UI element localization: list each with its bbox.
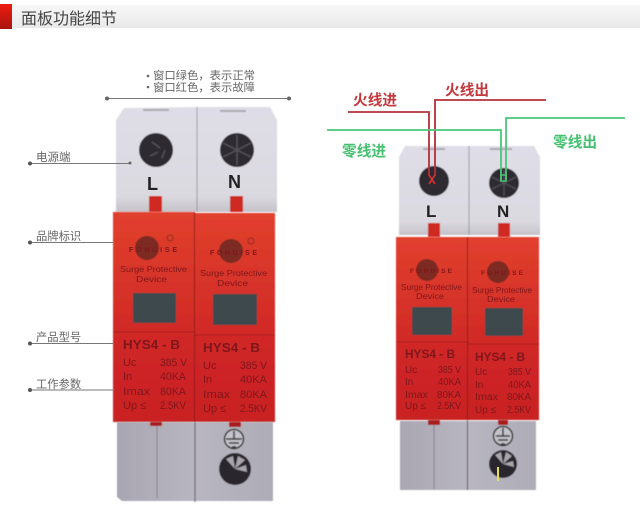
left device printed labels: 80KA: [160, 386, 187, 398]
right device red body: [396, 237, 539, 420]
right device printed labels: 2.5KV: [507, 405, 531, 416]
left device printed labels: FOHUISE: [210, 250, 257, 257]
left device brand logos: [135, 236, 159, 260]
right device printed labels: 40KA: [438, 377, 461, 388]
left device printed labels: 40KA: [160, 371, 187, 383]
wire: neutral in: [327, 130, 501, 180]
callout: 品牌标识: 品牌标识: [36, 229, 81, 243]
right device top grey housing: [399, 146, 540, 237]
right device N terminal screw: [489, 168, 519, 198]
left device printed labels: Up ≤: [123, 400, 146, 412]
left device printed labels: FOHUISE: [129, 247, 177, 254]
callout: 电源端: 电源端: [36, 150, 70, 164]
left device printed labels: In: [123, 371, 132, 383]
left device status windows: [133, 293, 176, 323]
callout: 工作参数: [28, 377, 113, 392]
left device printed labels: Uc: [203, 360, 217, 372]
header bar: [0, 4, 640, 29]
left device printed labels: Device: [217, 278, 248, 288]
right device printed labels: 80KA: [437, 390, 461, 401]
title: 面板功能细节: [21, 10, 117, 28]
left device printed labels: 2.5KV: [160, 400, 187, 412]
right device printed labels: 385 V: [438, 365, 461, 376]
wire: neutral out: [506, 118, 625, 180]
right device lower screw: [489, 450, 517, 478]
left device printed labels: 40KA: [240, 374, 268, 386]
right device printed labels: FOHUISE: [481, 270, 524, 277]
right device printed labels: Imax: [475, 392, 498, 403]
left device printed labels: Imax: [203, 389, 231, 401]
left device printed labels: 385 V: [160, 357, 188, 369]
callout: 工作参数: 工作参数: [36, 377, 81, 391]
left device printed labels: [120, 247, 268, 415]
left device printed labels: Imax: [123, 386, 151, 398]
left device printed labels: 80KA: [240, 389, 268, 401]
left device printed labels: Device: [136, 274, 167, 284]
right device printed labels: Surge Protective: [401, 283, 463, 292]
left device printed labels: HYS4 - B: [203, 340, 260, 355]
left device printed labels: HYS4 - B: [123, 337, 180, 352]
wire terminal marks: [429, 175, 435, 184]
left device terminal letters: N: [228, 172, 241, 192]
right device printed labels: Surge Protective: [472, 286, 533, 295]
right device printed labels: Up ≤: [475, 405, 497, 416]
right device printed labels: 40KA: [508, 380, 531, 391]
right device status windows: [412, 307, 452, 335]
left device bottom grey housing: [117, 422, 273, 502]
left device L terminal screw: [139, 133, 173, 167]
right device printed labels: Up ≤: [405, 401, 427, 412]
wire: live in: [348, 112, 429, 176]
width dimension line: [105, 96, 291, 100]
left device lower screw: [219, 453, 251, 485]
right device terminal letters: [426, 202, 509, 221]
left device printed labels: In: [203, 374, 212, 386]
callout: 品牌标识: [28, 229, 113, 244]
left device terminal letters: L: [147, 174, 158, 194]
label: 火线进: 火线进: [353, 91, 397, 109]
right device printed labels: HYS4 - B: [475, 350, 525, 364]
right device printed labels: 2.5KV: [437, 401, 461, 412]
right device: wiring view: [396, 146, 540, 490]
callout: 电源端: [28, 150, 132, 166]
right device printed labels: In: [475, 380, 483, 391]
note: window colour meaning: [147, 68, 255, 94]
callout: 产品型号: [28, 330, 113, 346]
right device printed labels: 80KA: [507, 392, 531, 403]
left device printed labels: Surge Protective: [200, 268, 267, 278]
label: 零线进: 零线进: [342, 142, 386, 160]
left device terminal letters: [147, 172, 241, 194]
right device printed labels: [401, 268, 533, 416]
left device top grey housing: [116, 107, 277, 212]
right device printed labels: In: [405, 377, 413, 388]
left device ground symbol: [224, 430, 244, 448]
left device printed labels: 2.5KV: [240, 403, 268, 415]
left device: surge protector front view: [113, 107, 277, 502]
left device printed labels: Uc: [123, 357, 137, 369]
right device printed labels: Device: [416, 292, 445, 301]
label: 零线出: 零线出: [553, 133, 597, 151]
right device L terminal screw: [419, 166, 449, 196]
right device terminal letters: L: [426, 202, 436, 221]
left device red body: [113, 212, 275, 422]
yellow wire marker: [497, 467, 499, 481]
neutral terminal mark: [501, 175, 506, 181]
right device bottom grey housing: [400, 420, 536, 490]
right device printed labels: 385 V: [508, 367, 531, 378]
callout: 产品型号: 产品型号: [36, 330, 81, 344]
right device printed labels: Imax: [405, 390, 428, 401]
note: window colour meaning: 窗口红色，表示故障: [153, 80, 255, 94]
left device printed labels: Surge Protective: [120, 264, 187, 274]
note: window colour meaning: 窗口绿色，表示正常: [153, 68, 255, 82]
right device printed labels: Uc: [405, 365, 417, 376]
wire: live out: [435, 100, 546, 176]
header red marker: [0, 4, 12, 29]
right device ground symbol: [494, 426, 512, 446]
label: 火线出: 火线出: [445, 81, 489, 99]
right device terminal letters: N: [497, 202, 509, 221]
left device printed labels: 385 V: [240, 360, 268, 372]
right device printed labels: FOHUISE: [410, 268, 453, 275]
left device printed labels: Up ≤: [203, 403, 226, 415]
right device printed labels: Device: [487, 295, 516, 304]
right device brand logos: [416, 259, 438, 281]
right device printed labels: HYS4 - B: [405, 347, 455, 361]
left device N terminal screw: [220, 133, 254, 167]
right device printed labels: Uc: [475, 367, 487, 378]
